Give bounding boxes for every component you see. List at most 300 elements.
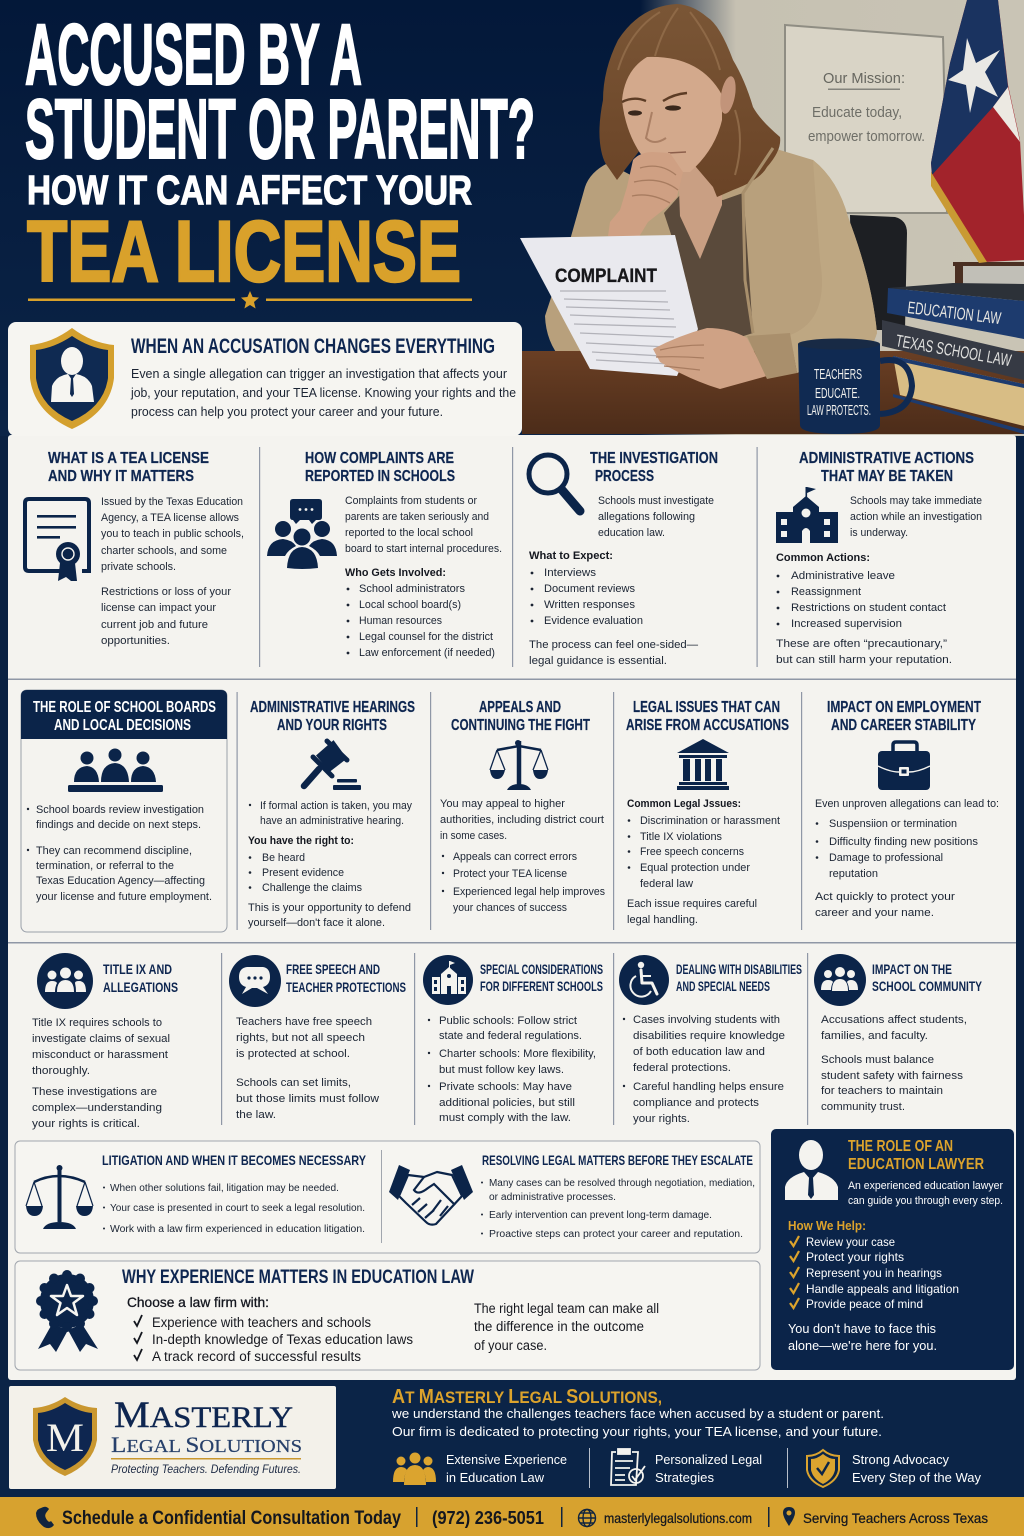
body text: Interviews bbox=[544, 567, 597, 579]
body text: complex—understanding bbox=[32, 1102, 162, 1114]
hero classroom wall bbox=[640, 0, 1024, 436]
body text: What to Expect: bbox=[529, 550, 613, 562]
panel: free speech bbox=[229, 955, 406, 1121]
icon: gavel bbox=[304, 739, 361, 790]
heading: ADMINISTRATIVE HEARINGS bbox=[250, 699, 415, 716]
body text: Local school board(s) bbox=[359, 599, 461, 611]
body text: legal handling. bbox=[627, 914, 698, 926]
body text: Schools can set limits, bbox=[236, 1077, 351, 1089]
title divider with star bbox=[28, 291, 472, 308]
body text: Agency, a TEA license allows bbox=[101, 512, 239, 524]
text: litigation bullets: Your case is presented in court to seek a legal resolution. bbox=[110, 1203, 365, 1214]
body text: Appeals can correct errors bbox=[453, 851, 577, 863]
body text: your rights is critical. bbox=[32, 1118, 140, 1130]
heading: FREE SPEECH AND bbox=[286, 961, 380, 977]
icon: logo shield bbox=[33, 1397, 97, 1476]
body text: authorities, including district court bbox=[440, 814, 604, 826]
body text: Damage to professional bbox=[829, 852, 943, 864]
hand at chin bbox=[608, 152, 683, 240]
heading: WHY EXPERIENCE MATTERS IN EDUCATION LAW bbox=[122, 1267, 474, 1288]
body text: is underway. bbox=[850, 527, 908, 539]
body text: current job and future bbox=[101, 619, 208, 631]
heading bbox=[590, 450, 718, 485]
heading: EDUCATION LAWYER bbox=[848, 1156, 984, 1173]
coffee mug bbox=[798, 338, 912, 434]
heading: TITLE IX AND bbox=[103, 961, 172, 977]
panel: administrative hearings bbox=[248, 699, 415, 929]
text: resolving bullets bbox=[481, 1178, 755, 1240]
checklist: A track record of successful results bbox=[152, 1349, 361, 1364]
consultation text: Schedule a Confidential Consultation Today bbox=[62, 1508, 401, 1529]
icon: group with speech bubble bbox=[267, 499, 337, 569]
title: STUDENT OR PARENT? bbox=[25, 82, 535, 176]
body text: You have the right to: bbox=[248, 835, 354, 847]
title bbox=[25, 7, 535, 300]
body text: Present evidence bbox=[262, 867, 344, 879]
contact bar bbox=[0, 1497, 1024, 1536]
section dividers bbox=[8, 447, 1016, 1125]
text: right legal team bbox=[474, 1301, 659, 1353]
heading: WHAT IS A TEA LICENSE bbox=[48, 450, 209, 467]
text: in Education Law bbox=[446, 1471, 545, 1485]
body text: These are often “precautionary,” bbox=[776, 638, 947, 650]
body text: license can impact your bbox=[101, 602, 216, 614]
icon: scales of justice bbox=[490, 740, 548, 790]
body text: Restrictions on student contact bbox=[791, 602, 946, 614]
body text: Law enforcement (if needed) bbox=[359, 647, 495, 659]
body text bbox=[821, 1014, 967, 1113]
hero navy background bbox=[0, 0, 1024, 436]
heading: litigation: LITIGATION AND WHEN IT BECOMES NECESSARY bbox=[102, 1152, 367, 1168]
holding hand and sleeve bbox=[653, 148, 877, 389]
heading bbox=[286, 961, 406, 995]
firm statement: AT MASTERLY LEGAL SOLUTIONS, bbox=[392, 1386, 662, 1408]
text: right legal team: the difference in the outcome bbox=[474, 1319, 644, 1334]
body text: have an administrative hearing. bbox=[260, 815, 404, 827]
icon: map pin bbox=[783, 1507, 795, 1526]
feature: personalized strategies bbox=[589, 1448, 762, 1488]
intro text: can guide you through every step. bbox=[848, 1195, 1003, 1207]
body text: Suspensiion or termination bbox=[829, 818, 957, 830]
heading: WHEN AN ACCUSATION CHANGES EVERYTHING bbox=[131, 335, 495, 358]
icon: phone bbox=[36, 1507, 54, 1528]
icon: globe bbox=[578, 1510, 596, 1526]
heading: AND SPECIAL NEEDS bbox=[676, 978, 770, 994]
intro text bbox=[848, 1180, 1003, 1207]
feature: strong advocacy bbox=[787, 1448, 982, 1488]
logo name: LEGAL SOLUTIONS bbox=[111, 1432, 302, 1457]
text: resolving bullets: Early intervention can prevent long-term damage. bbox=[489, 1210, 712, 1221]
body text bbox=[248, 800, 412, 929]
panel: different schools bbox=[423, 955, 603, 1124]
body text: Schools must investigate bbox=[598, 495, 714, 507]
body text: Equal protection under bbox=[640, 862, 750, 874]
body text: in some cases. bbox=[440, 830, 507, 842]
coffee mug: TEACHERS bbox=[814, 366, 862, 383]
body text bbox=[529, 495, 714, 667]
body text: Schools must balance bbox=[821, 1054, 934, 1066]
how we help checklist: Review your case bbox=[806, 1235, 895, 1249]
firm statement: Our firm is dedicated to protecting your rights, your TEA license, and your future. bbox=[392, 1425, 882, 1439]
panel: when an accusation changes everything bbox=[8, 322, 522, 436]
heading: THE INVESTIGATION bbox=[590, 450, 718, 467]
icon: speech bubble in circle bbox=[229, 955, 281, 1007]
how we help checklist: Handle appeals and litigation bbox=[806, 1282, 959, 1296]
text: Every Step of the Way bbox=[852, 1471, 982, 1485]
body text bbox=[623, 1014, 785, 1125]
icon: board members at desk bbox=[68, 748, 163, 792]
icon: clipboard bbox=[611, 1449, 645, 1485]
heading banner bbox=[21, 690, 227, 739]
icon: scales of justice bbox=[26, 1165, 93, 1229]
complaint paper bbox=[520, 235, 698, 376]
firm statement: we understand the challenges teachers face when accused by a student or parent. bbox=[391, 1407, 884, 1421]
body text: Title IX violations bbox=[640, 831, 722, 843]
icon: magnifying glass bbox=[529, 455, 580, 511]
body text: Act quickly to protect your bbox=[815, 891, 955, 903]
text: Personalized Legal bbox=[655, 1453, 762, 1467]
heading bbox=[480, 961, 603, 994]
body text: If formal action is taken, you may bbox=[260, 800, 412, 812]
heading banner: THE ROLE OF SCHOOL BOARDS bbox=[33, 699, 216, 716]
heading: IMPACT ON THE bbox=[872, 961, 952, 977]
closing text: alone—we're here for you. bbox=[788, 1339, 937, 1353]
footer navy background bbox=[0, 1380, 1024, 1497]
body text: Charter schools: More flexibility, bbox=[439, 1048, 596, 1060]
icon: group in circle bbox=[37, 953, 93, 1009]
how we help checklist: Provide peace of mind bbox=[806, 1297, 923, 1311]
body text: thoroughly. bbox=[32, 1065, 90, 1077]
body text: federal law bbox=[640, 878, 693, 890]
woman reading a complaint bbox=[545, 4, 877, 379]
law books bbox=[882, 283, 1024, 434]
body text: Careful handling helps ensure bbox=[633, 1081, 784, 1093]
how we help checklist: Protect your rights bbox=[806, 1250, 904, 1264]
body text: Accusations affect students, bbox=[821, 1014, 967, 1026]
coffee mug: EDUCATE. bbox=[815, 385, 860, 402]
heading: PROCESS bbox=[595, 468, 654, 485]
body text: investigate claims of sexual bbox=[32, 1033, 170, 1045]
heading: AND YOUR RIGHTS bbox=[277, 717, 387, 734]
body text: student safety with fairness bbox=[821, 1070, 964, 1082]
body text bbox=[101, 496, 244, 647]
icon: school in circle bbox=[423, 955, 473, 1005]
desk bbox=[522, 351, 1024, 434]
body text: Legal counsel for the district bbox=[359, 631, 493, 643]
heading: SPECIAL CONSIDERATIONS bbox=[480, 961, 603, 977]
heading: ARISE FROM ACCUSATIONS bbox=[626, 717, 789, 734]
intro text bbox=[130, 366, 516, 419]
heading: SCHOOL COMMUNITY bbox=[872, 978, 982, 994]
body text: yourself—don't face it alone. bbox=[248, 917, 385, 929]
icon: gold shield with check bbox=[807, 1450, 839, 1487]
body text: Schools may take immediate bbox=[850, 495, 982, 507]
complaint label: COMPLAINT bbox=[555, 266, 657, 287]
text: Extensive Experience bbox=[446, 1453, 567, 1467]
body text bbox=[428, 1015, 596, 1124]
checklist: Experience with teachers and schools bbox=[152, 1315, 371, 1330]
hair bbox=[599, 4, 780, 197]
body text: These investigations are bbox=[32, 1086, 157, 1098]
heading: CONTINUING THE FIGHT bbox=[451, 717, 590, 734]
text: resolving bullets: or administrative processes. bbox=[489, 1192, 616, 1203]
body text bbox=[440, 798, 605, 914]
logo name bbox=[111, 1395, 302, 1460]
body text: rights, but not all speech bbox=[236, 1032, 365, 1044]
body text: but those limits must follow bbox=[236, 1093, 379, 1105]
body text: Public schools: Follow strict bbox=[439, 1015, 577, 1027]
chair bbox=[850, 215, 907, 330]
texas flag bbox=[931, 0, 1024, 263]
text: litigation bullets: When other solutions fail, litigation may be needed. bbox=[110, 1183, 339, 1194]
heading: TEACHER PROTECTIONS bbox=[286, 979, 406, 995]
body text: but must follow key laws. bbox=[439, 1064, 564, 1076]
heading bbox=[250, 699, 415, 734]
body text: Document reviews bbox=[544, 583, 635, 595]
body text: state and federal regulations. bbox=[439, 1030, 582, 1042]
heading bbox=[799, 450, 974, 485]
icon: courthouse bbox=[677, 739, 729, 790]
text: litigation bullets bbox=[103, 1183, 365, 1235]
body text: They can recommend discipline, bbox=[36, 845, 192, 857]
heading bbox=[848, 1138, 984, 1173]
icon: briefcase bbox=[878, 742, 930, 790]
body text: for teachers to maintain bbox=[821, 1085, 943, 1097]
body text: This is your opportunity to defend bbox=[248, 902, 411, 914]
body text: opportunities. bbox=[101, 635, 170, 647]
heading bbox=[451, 699, 590, 734]
checklist: In-depth knowledge of Texas education laws bbox=[152, 1332, 413, 1347]
body text: private schools. bbox=[101, 561, 176, 573]
icon: handshake bbox=[389, 1165, 473, 1225]
panel: disabilities bbox=[619, 955, 802, 1125]
body text: Difficulty finding new positions bbox=[829, 836, 979, 848]
body text: School boards review investigation bbox=[36, 804, 204, 816]
heading bbox=[103, 961, 178, 995]
body text: Discrimination or harassment bbox=[640, 815, 780, 827]
heading: REPORTED IN SCHOOLS bbox=[305, 468, 455, 485]
body text: Private schools: May have bbox=[439, 1081, 572, 1093]
cardigan bbox=[545, 148, 877, 379]
text bbox=[655, 1453, 762, 1485]
heading: APPEALS AND bbox=[479, 699, 561, 716]
panel: role of school boards bbox=[21, 690, 227, 932]
body text: your chances of success bbox=[453, 902, 567, 914]
icon: shield with teacher bbox=[30, 328, 114, 429]
icon: lawyer silhouette bbox=[785, 1140, 838, 1200]
body text: community trust. bbox=[821, 1101, 905, 1113]
body text: Reassignment bbox=[791, 586, 861, 598]
body text: the law. bbox=[236, 1109, 276, 1121]
body text: but can still harm your reputation. bbox=[776, 654, 952, 666]
body text: your rights. bbox=[633, 1113, 690, 1125]
whiteboard: our mission bbox=[785, 25, 947, 213]
title: HOW IT CAN AFFECT YOUR bbox=[27, 167, 472, 213]
body text bbox=[345, 495, 502, 659]
heading: ALLEGATIONS bbox=[103, 979, 178, 995]
body text bbox=[815, 798, 999, 919]
heading bbox=[827, 699, 981, 734]
body text: Issued by the Texas Education bbox=[101, 496, 243, 508]
panel: school community bbox=[814, 954, 982, 1113]
body text: reported to the local school bbox=[345, 527, 473, 539]
text: right legal team: The right legal team can make all bbox=[474, 1301, 659, 1316]
blouse bbox=[664, 193, 753, 350]
intro text: An experienced education lawyer bbox=[848, 1180, 1003, 1192]
checklist: Choose a law firm with: bbox=[127, 1294, 269, 1310]
checklist bbox=[127, 1294, 413, 1364]
body text: You may appeal to higher bbox=[440, 798, 565, 810]
panel: the investigation process bbox=[529, 450, 718, 667]
body text: is protected at school. bbox=[236, 1048, 350, 1060]
body text: Written responses bbox=[544, 599, 636, 611]
panel: appeals bbox=[440, 699, 605, 914]
body text bbox=[32, 1017, 170, 1130]
body text: Human resources bbox=[359, 615, 442, 627]
body text bbox=[776, 495, 982, 666]
body text: School administrators bbox=[359, 583, 465, 595]
icon: logo shield: M bbox=[46, 1415, 84, 1460]
body text: findings and decide on next steps. bbox=[36, 819, 201, 831]
logo tagline: Protecting Teachers. Defending Futures. bbox=[111, 1464, 301, 1476]
intro text: Even a single allegation can trigger an investigation that affects your bbox=[131, 366, 508, 381]
text bbox=[852, 1453, 982, 1485]
logo card: Masterly Legal Solutions bbox=[9, 1386, 336, 1489]
heading bbox=[872, 961, 982, 994]
icon: award rosette bbox=[36, 1270, 98, 1352]
body text bbox=[236, 1016, 379, 1121]
body text: Evidence evaluation bbox=[544, 615, 643, 627]
heading bbox=[305, 450, 455, 485]
body text: you to teach in public schools, bbox=[101, 528, 244, 540]
text: resolving bullets: Many cases can be resolved through negotiation, mediation, bbox=[489, 1178, 755, 1189]
body text: disabilities require knowledge bbox=[633, 1030, 785, 1042]
icon: certificate bbox=[25, 499, 89, 581]
panel: how complaints are reported bbox=[267, 450, 502, 659]
body text: parents are taken seriously and bbox=[345, 511, 489, 523]
body text: Texas Education Agency—affecting bbox=[36, 875, 205, 887]
body text: federal protections. bbox=[633, 1062, 731, 1074]
heading: AND WHY IT MATTERS bbox=[48, 468, 194, 485]
face bbox=[622, 57, 722, 172]
body text bbox=[27, 804, 212, 903]
text bbox=[446, 1453, 567, 1485]
body text: Complaints from students or bbox=[345, 495, 477, 507]
intro text: job, your reputation, and your TEA license. Knowing your rights and the bbox=[130, 385, 516, 400]
body text: board to start internal procedures. bbox=[345, 543, 502, 555]
text: Strong Advocacy bbox=[852, 1453, 950, 1467]
whiteboard: our mission: Our Mission: bbox=[823, 70, 905, 87]
text: litigation bullets: Work with a law firm experienced in education litigation. bbox=[110, 1224, 365, 1235]
panel: litigation and resolving matters bbox=[15, 1141, 760, 1253]
body text: Protect your TEA license bbox=[453, 868, 567, 880]
body text: your license and future employment. bbox=[36, 891, 212, 903]
icon: community in circle bbox=[814, 954, 866, 1006]
body text: must comply with the law. bbox=[439, 1112, 571, 1124]
whiteboard: our mission: Educate today, bbox=[812, 104, 902, 121]
icon: school building bbox=[776, 487, 838, 543]
body text: termination, or referral to the bbox=[36, 860, 174, 872]
heading: ADMINISTRATIVE ACTIONS bbox=[799, 450, 974, 467]
text: Strategies bbox=[655, 1471, 714, 1485]
heading: LEGAL ISSUES THAT CAN bbox=[633, 699, 780, 716]
panel: why experience matters bbox=[15, 1261, 760, 1370]
heading: THE ROLE OF AN bbox=[848, 1138, 953, 1155]
text: right legal team: of your case. bbox=[474, 1338, 547, 1353]
panel: administrative actions bbox=[776, 450, 982, 666]
logo name: MASTERLY bbox=[114, 1395, 293, 1436]
closing text bbox=[788, 1322, 937, 1353]
heading bbox=[676, 961, 802, 994]
heading: HOW COMPLAINTS ARE bbox=[305, 450, 454, 467]
body text: Common Actions: bbox=[776, 552, 870, 564]
heading bbox=[48, 450, 209, 485]
panel: title IX bbox=[32, 953, 178, 1130]
body text: of both education law and bbox=[633, 1046, 765, 1058]
body text: The process can feel one-sided— bbox=[529, 639, 698, 651]
title: ACCUSED BY A bbox=[25, 7, 362, 103]
how we help checklist bbox=[788, 1219, 959, 1311]
body text: misconduct or harassment bbox=[32, 1049, 168, 1061]
panel: impact on employment bbox=[815, 699, 999, 919]
body text: Even unproven allegations can lead to: bbox=[815, 798, 999, 810]
body text: Free speech concerns bbox=[640, 846, 744, 858]
body text: Each issue requires careful bbox=[627, 898, 757, 910]
heading: FOR DIFFERENT SCHOOLS bbox=[480, 978, 603, 994]
firm statement bbox=[391, 1386, 884, 1439]
body text: Title IX requires schools to bbox=[32, 1017, 162, 1029]
body text: allegations following bbox=[598, 511, 695, 523]
neck bbox=[678, 165, 722, 259]
title: TEA LICENSE bbox=[27, 204, 461, 300]
how we help checklist: How We Help: bbox=[788, 1219, 866, 1233]
icon: wheelchair in circle bbox=[619, 955, 669, 1005]
closing text: You don't have to face this bbox=[788, 1322, 936, 1336]
intro text: process can help you protect your career and your future. bbox=[131, 404, 443, 419]
icon: gold people bbox=[393, 1452, 436, 1485]
body text: Administrative leave bbox=[791, 570, 895, 582]
body text: Be heard bbox=[262, 852, 305, 864]
heading: THAT MAY BE TAKEN bbox=[821, 468, 953, 485]
body text: Cases involving students with bbox=[633, 1014, 780, 1026]
heading: DEALING WITH DISABILITIES bbox=[676, 961, 802, 977]
whiteboard: our mission: empower tomorrow. bbox=[808, 128, 925, 145]
body text: action while an investigation bbox=[850, 511, 982, 523]
service area: Serving Teachers Across Texas bbox=[803, 1510, 988, 1526]
panel: role of an education lawyer bbox=[771, 1129, 1014, 1370]
body text: Experienced legal help improves bbox=[453, 886, 605, 898]
body text: Who Gets Involved: bbox=[345, 567, 446, 579]
heading: AND CAREER STABILITY bbox=[831, 717, 976, 734]
website: masterlylegalsolutions.com bbox=[604, 1510, 752, 1526]
coffee mug: LAW PROTECTS. bbox=[807, 402, 871, 419]
body text: reputation bbox=[829, 868, 878, 880]
panel: legal issues bbox=[626, 699, 789, 926]
main content panel background bbox=[8, 435, 1016, 1380]
body text: compliance and protects bbox=[633, 1097, 760, 1109]
body text: Increased supervision bbox=[791, 618, 902, 630]
heading bbox=[626, 699, 789, 734]
text: resolving bullets: Proactive steps can protect your career and reputation. bbox=[489, 1229, 743, 1240]
body text: Restrictions or loss of your bbox=[101, 586, 231, 598]
heading banner: AND LOCAL DECISIONS bbox=[54, 717, 191, 734]
heading: resolving legal matters: RESOLVING LEGAL MATTERS BEFORE THEY ESCALATE bbox=[482, 1152, 753, 1168]
body text: charter schools, and some bbox=[101, 545, 227, 557]
body text: Teachers have free speech bbox=[236, 1016, 372, 1028]
how we help checklist: Represent you in hearings bbox=[806, 1266, 942, 1280]
body text: families, and faculty. bbox=[821, 1030, 928, 1042]
body text: legal guidance is essential. bbox=[529, 655, 667, 667]
